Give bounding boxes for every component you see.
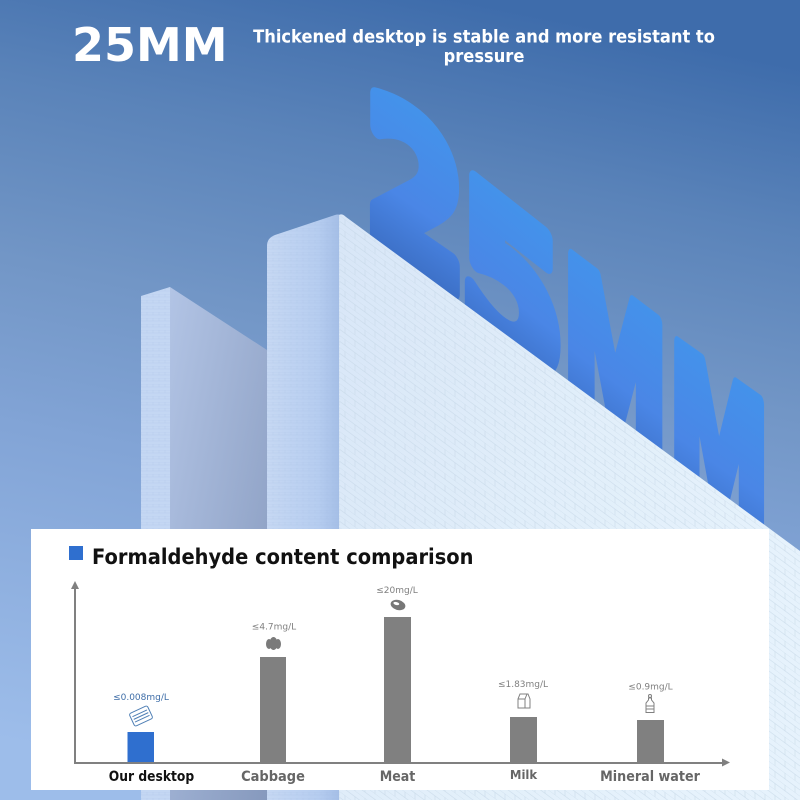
panel edge face	[267, 214, 340, 800]
icon: meat	[389, 598, 407, 612]
panel: formaldehyde comparison chart	[31, 529, 769, 790]
bar: our desktop: Our desktop	[109, 769, 194, 785]
bar: milk: ≤1.83mg/L	[498, 680, 548, 690]
subtitle text	[253, 27, 715, 67]
heading: 25MM: 25MM	[72, 18, 228, 72]
large slanted 25MM lettering behind the desktop: M	[562, 207, 668, 533]
panel front face with brick texture	[339, 214, 800, 800]
bar: meat: ≤20mg/L	[376, 586, 418, 596]
large slanted 25MM lettering behind the desktop: M	[668, 296, 770, 612]
bar: mineral water: ≤0.9mg/L	[628, 682, 673, 692]
icon: cabbage	[266, 637, 281, 650]
bar: our desktop: ≤0.008mg/L	[113, 693, 169, 703]
bar: meat	[376, 586, 418, 785]
bar: cabbage: ≤4.7mg/L	[252, 622, 296, 632]
large slanted 25MM lettering behind the desktop: 5	[460, 130, 564, 444]
large slanted 25MM lettering behind the desktop: 2	[365, 44, 466, 346]
icon: water bottle	[646, 694, 654, 712]
bar: mineral water	[600, 682, 700, 785]
chart axes	[71, 581, 730, 766]
bar: cabbage: Cabbage	[241, 769, 305, 785]
chart heading: Formaldehyde content comparison	[92, 544, 474, 569]
main 25mm thick desktop panel	[267, 214, 800, 800]
subtitle text: Thickened desktop is stable and more resistant to	[253, 27, 715, 48]
small desktop panel behind	[141, 287, 267, 800]
large slanted 25MM lettering behind the desktop	[365, 44, 770, 612]
bar: meat: Meat	[380, 769, 416, 785]
bar: milk: Milk	[510, 768, 538, 782]
bar: cabbage	[241, 622, 305, 785]
icon: milk carton	[518, 694, 530, 708]
icon: desktop board	[129, 705, 153, 727]
bar: mineral water: Mineral water	[600, 769, 700, 785]
subtitle text: pressure	[444, 46, 524, 67]
bar: milk	[498, 680, 548, 782]
bar: our desktop	[109, 693, 194, 785]
